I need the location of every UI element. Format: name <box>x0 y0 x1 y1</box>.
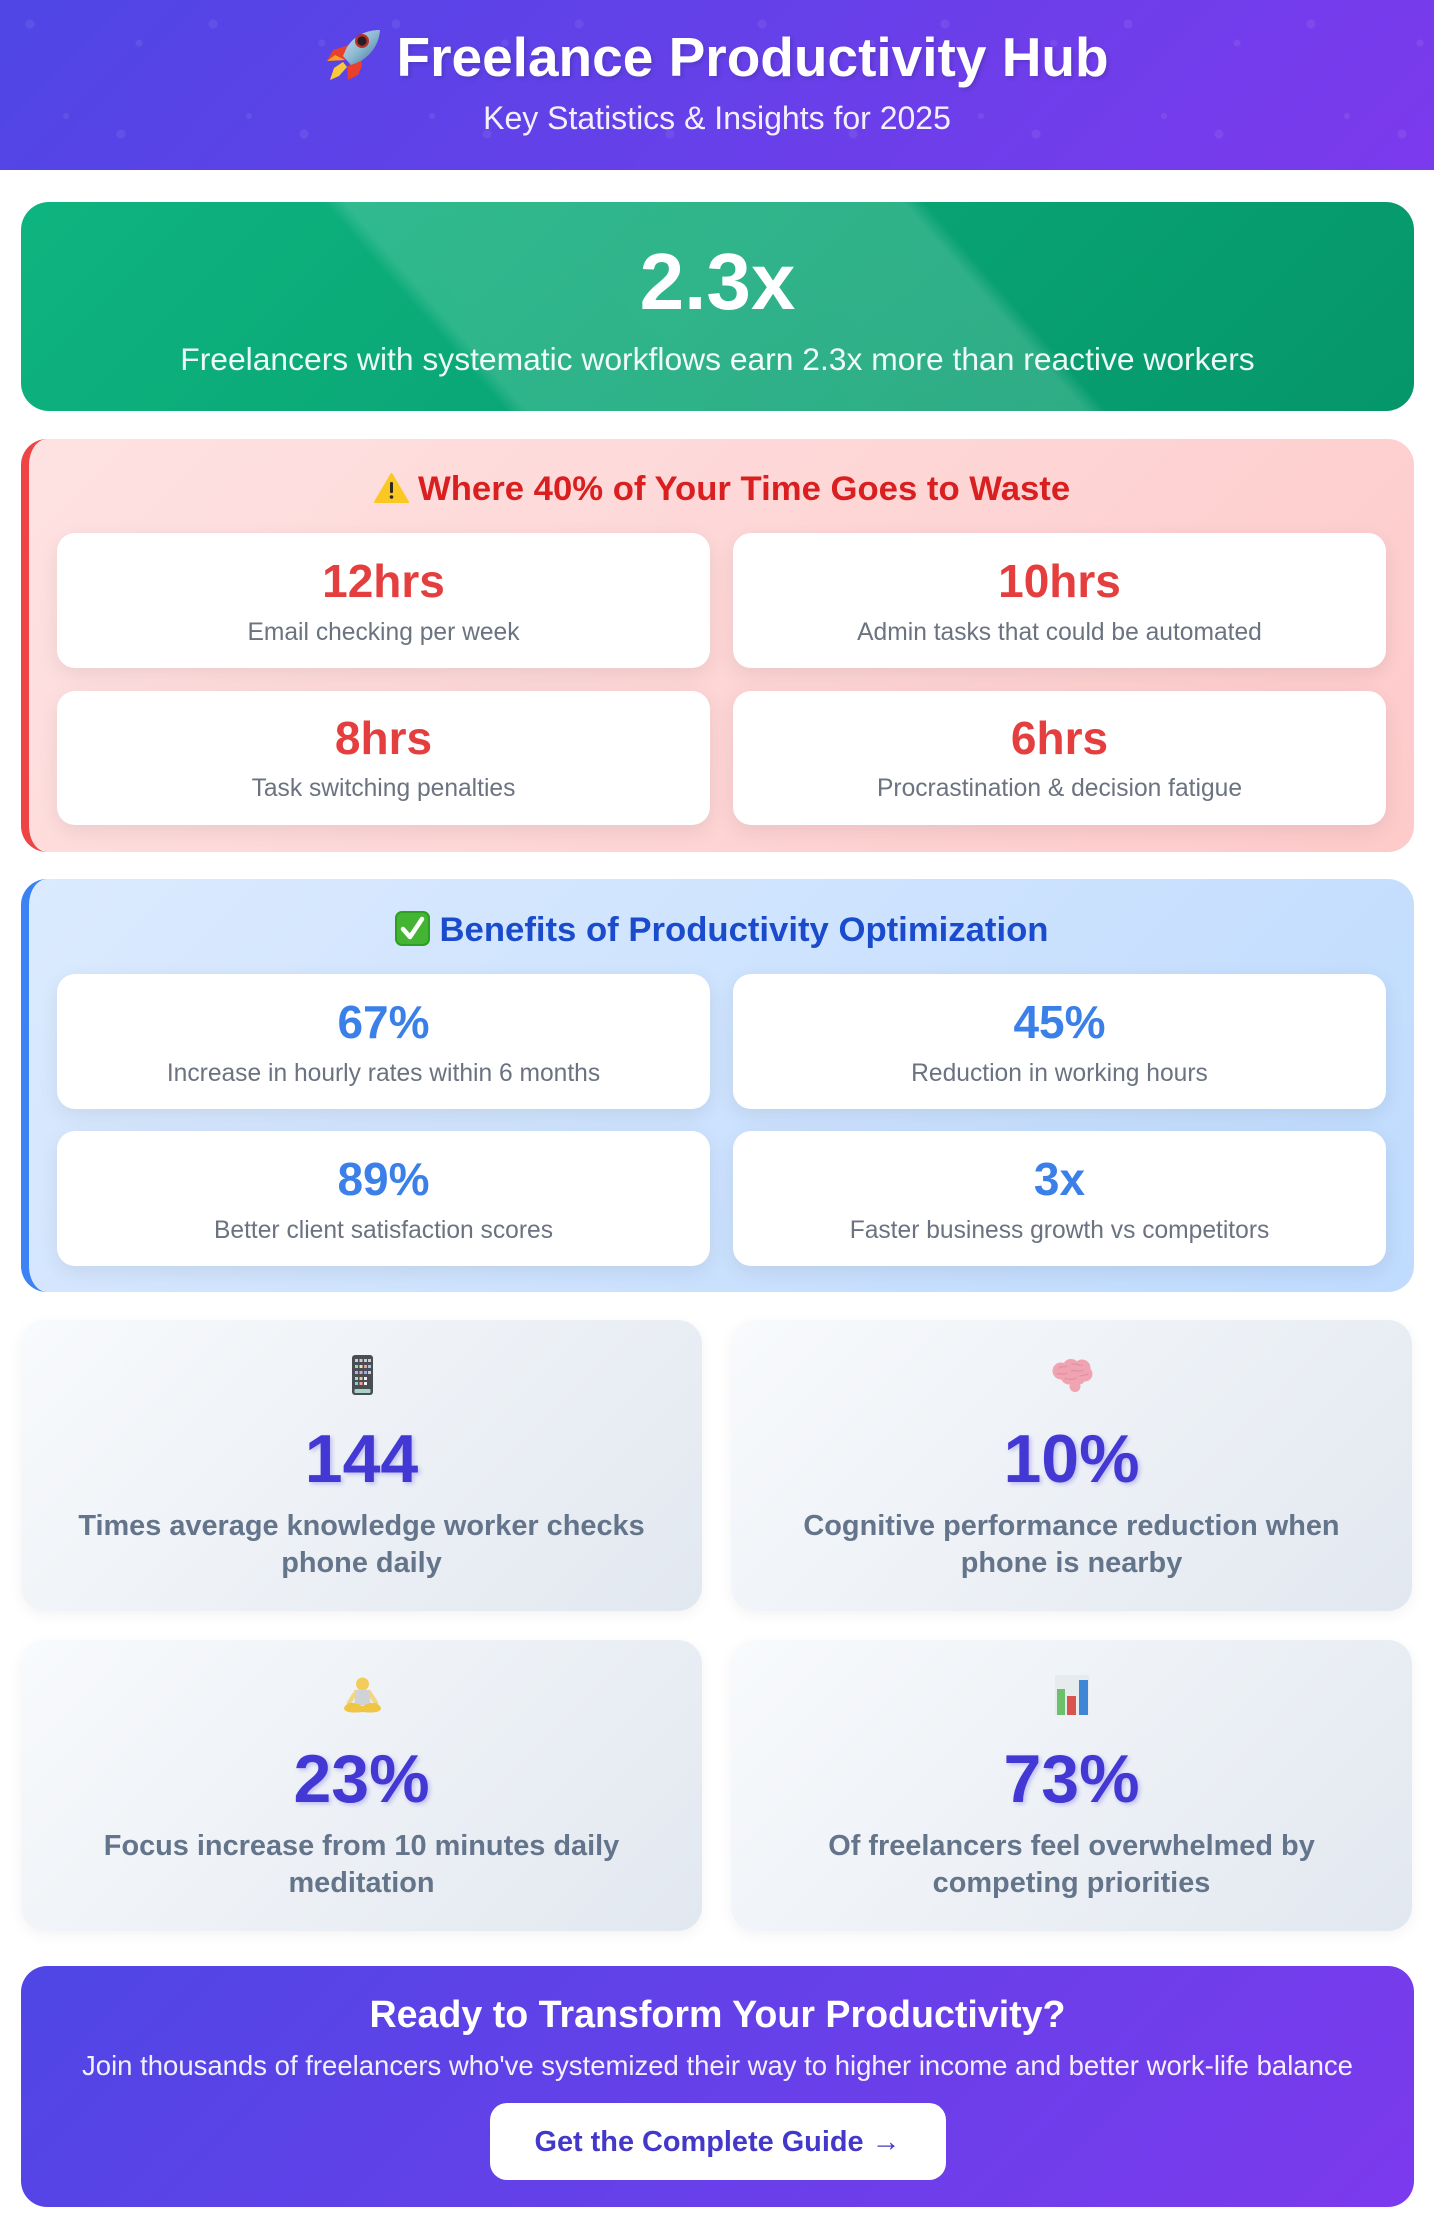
value: 10hrs <box>998 555 1121 607</box>
CTA heading: Ready to Transform Your Productivity? <box>369 1993 1066 2035</box>
section heading: Benefits of Productivity Optimization <box>440 910 1048 948</box>
stat card: email <box>57 533 710 668</box>
description <box>78 1510 645 1579</box>
description: Admin tasks that could be automated <box>857 618 1262 646</box>
CTA description: Join thousands of freelancers who've systemized their way to higher income and better work-life balance <box>82 2050 1353 2081</box>
description: Reduction in working hours <box>911 1060 1208 1086</box>
stat card: admin <box>733 533 1386 668</box>
panel: overwhelmed freelancers <box>731 1640 1412 1931</box>
description: Email checking per week <box>247 618 520 646</box>
value: 10% <box>1003 1421 1140 1497</box>
description: Focus increase from 10 minutes daily <box>104 1830 619 1862</box>
description: Increase in hourly rates within 6 months <box>167 1060 600 1086</box>
icon: brain <box>1052 1359 1092 1392</box>
panel: cognitive performance <box>731 1320 1412 1611</box>
panel: meditation focus <box>21 1640 702 1931</box>
icon: warning <box>374 473 409 503</box>
icon: phone <box>352 1355 373 1395</box>
description <box>803 1510 1340 1579</box>
icon: meditating person <box>344 1678 381 1712</box>
description: Procrastination & decision fatigue <box>877 775 1242 802</box>
title: Freelance Productivity Hub <box>396 26 1109 88</box>
description: Faster business growth vs competitors <box>850 1216 1269 1244</box>
value: 3x <box>1034 1153 1085 1205</box>
stat card: working hours <box>733 974 1386 1109</box>
description: Of freelancers feel overwhelmed by <box>828 1830 1315 1862</box>
stat card: hourly rates <box>57 974 710 1109</box>
header banner <box>0 0 1434 170</box>
value: 45% <box>1013 996 1106 1048</box>
value: 8hrs <box>335 712 432 764</box>
icon: bar chart <box>1055 1675 1089 1715</box>
panel: time waste <box>21 439 1414 852</box>
icon: rocket <box>327 30 380 80</box>
hero description: Freelancers with systematic workflows earn 2.3x more than reactive workers <box>180 341 1255 377</box>
description: phone is nearby <box>961 1547 1182 1579</box>
description <box>828 1830 1315 1899</box>
button label: Get the Complete Guide → <box>534 2126 900 2158</box>
value: 6hrs <box>1011 712 1108 764</box>
description: Times average knowledge worker checks <box>78 1510 645 1542</box>
stat card: client satisfaction <box>57 1131 710 1266</box>
description: Better client satisfaction scores <box>214 1216 553 1244</box>
stat card: task switching <box>57 690 710 825</box>
stat card: procrastination <box>733 690 1386 825</box>
value: 23% <box>293 1741 430 1817</box>
value: 89% <box>337 1153 430 1205</box>
value: 67% <box>337 996 430 1048</box>
hero number: 2.3x <box>640 237 795 326</box>
panel: hero statistic <box>21 202 1414 411</box>
stat card: business growth <box>733 1131 1386 1266</box>
description: Cognitive performance reduction when <box>803 1510 1340 1542</box>
subtitle: Key Statistics & Insights for 2025 <box>483 100 951 136</box>
value: 12hrs <box>322 555 445 607</box>
panel: phone checks <box>21 1320 702 1611</box>
description: Task switching penalties <box>252 775 515 802</box>
panel: benefits <box>21 879 1414 1292</box>
icon: check mark <box>395 911 430 946</box>
value: 144 <box>305 1421 418 1497</box>
CTA button <box>490 2103 946 2180</box>
description: phone daily <box>281 1547 442 1579</box>
description <box>104 1830 619 1899</box>
description: competing priorities <box>933 1867 1210 1899</box>
panel: call to action <box>21 1966 1414 2207</box>
description: meditation <box>288 1867 435 1899</box>
section heading: Where 40% of Your Time Goes to Waste <box>418 470 1070 508</box>
value: 73% <box>1003 1741 1140 1817</box>
